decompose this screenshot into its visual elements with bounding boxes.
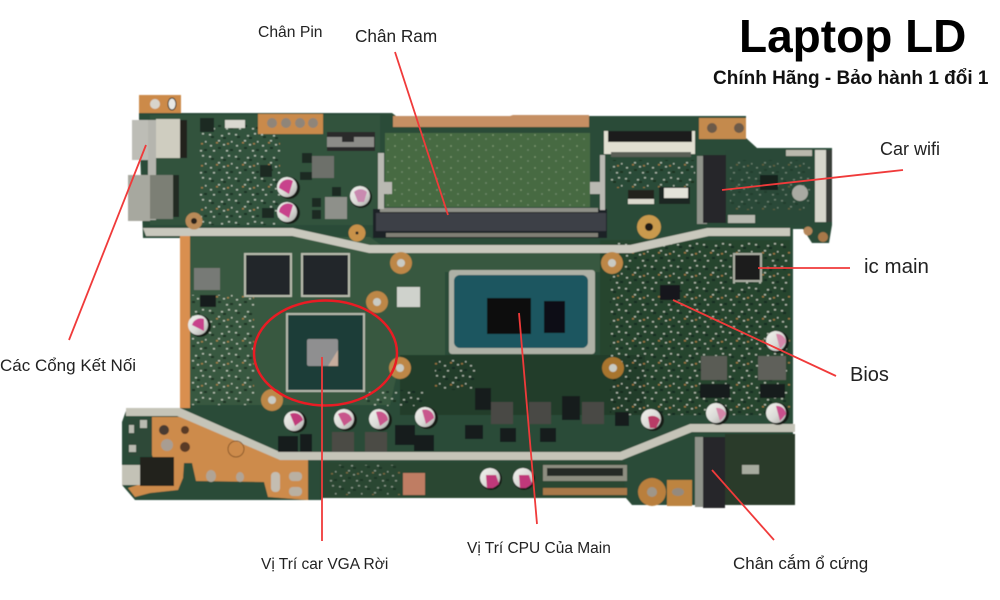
copper grid: [403, 473, 425, 495]
RAM slot: [373, 208, 607, 238]
label: Vị Trí CPU Của Main: Vị Trí CPU Của Main: [467, 540, 611, 557]
label: Chân Ram: Chân Ram: [355, 26, 437, 46]
arrow: VGA: [321, 357, 323, 541]
inductors: [194, 156, 786, 452]
subtitle: Chính Hãng - Bảo hành 1 đổi 1: [713, 68, 989, 89]
copper screw pads: [261, 252, 624, 411]
label: Vị Trí car VGA Rời: Vị Trí car VGA Rời: [261, 556, 388, 573]
CPU package: [449, 270, 595, 354]
arrow: SSD: [712, 470, 774, 540]
BIOS chip: [660, 285, 680, 300]
solder component texture: [192, 125, 810, 495]
dark mosfets: [200, 295, 785, 452]
arrow: Bios: [673, 300, 836, 376]
silver strip upper: [143, 228, 790, 253]
gold circle and copper square bottom right: [638, 478, 692, 506]
ports: USB and HDMI: [128, 119, 187, 221]
silver strip lower: [126, 408, 795, 460]
silver post: [792, 185, 808, 201]
mainboard photo illustration: [122, 95, 832, 508]
capacitors: [188, 177, 789, 490]
label: Chân cắm ổ cứng: Chân cắm ổ cứng: [733, 554, 868, 573]
RAM area green: [385, 133, 590, 207]
RAM slot latches: [378, 153, 605, 210]
arrow: Chân Ram: [395, 52, 448, 215]
SSD slot: [695, 434, 795, 508]
small chips upper left: [260, 153, 341, 219]
arrow: Car wifi: [722, 170, 903, 190]
arrow: ic main: [758, 267, 850, 269]
right top IC: [760, 175, 778, 190]
copper battery pads: [258, 114, 323, 134]
label: Chân Pin: Chân Pin: [258, 24, 323, 41]
copper lower left panel: [128, 417, 308, 500]
arrow: Các Cổng Kết Nối: [69, 145, 146, 340]
right side flex connector: [786, 150, 832, 222]
gold mounting circle: [637, 215, 661, 239]
WiFi slot: [697, 155, 726, 224]
keyboard connector: [604, 131, 695, 157]
flex connectors left: [200, 118, 245, 132]
copper tab top right: [699, 118, 746, 139]
copper mounting tab top left: [139, 95, 181, 113]
copper RAM edge: [393, 115, 589, 127]
bottom connector: [543, 465, 627, 495]
VRAM chips: [244, 253, 350, 297]
gold circle near RAM: [348, 224, 366, 242]
battery connector: [327, 132, 375, 151]
copper left edge strip: [180, 236, 190, 408]
board body: [122, 96, 832, 505]
copper pads bottom of right connector: [804, 226, 828, 242]
label: Bios: Bios: [850, 364, 889, 386]
label: ic main: ic main: [864, 255, 929, 278]
WLAN label: [728, 215, 755, 223]
audio jack: [122, 418, 174, 486]
red circle around VGA: [254, 300, 397, 406]
ic main chip: [733, 253, 762, 282]
GPU package: [286, 313, 365, 392]
green board tone patches: [150, 115, 813, 498]
QR label: [397, 287, 420, 307]
gold circle top left: [186, 212, 202, 230]
title: Laptop LD: [739, 10, 966, 62]
FP and HDD connectors: [628, 187, 690, 204]
arrow: CPU: [519, 313, 537, 524]
label: Các Cổng Kết Nối: Các Cổng Kết Nối: [0, 356, 136, 375]
label: Car wifi: Car wifi: [880, 139, 940, 159]
